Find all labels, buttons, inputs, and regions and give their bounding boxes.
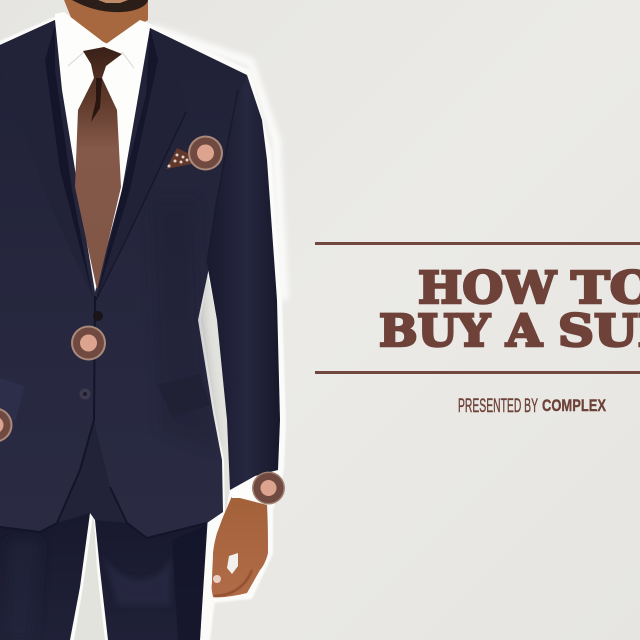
jacket sleeve [207, 75, 280, 490]
figure: suited man [0, 0, 280, 640]
presented by: PRESENTED BY [458, 396, 538, 417]
jacket buttons [80, 311, 103, 400]
white halo around figure [0, 20, 283, 640]
left lapel [0, 20, 93, 298]
title: TO [571, 263, 640, 314]
jacket centre below buttons [57, 420, 127, 523]
title [379, 263, 640, 357]
marker: jacket button [71, 326, 106, 360]
gap between legs [74, 515, 105, 640]
neck and beard [64, 0, 148, 44]
right flap pocket [158, 374, 210, 418]
shirt cuff [230, 486, 258, 498]
bottom rule [315, 371, 640, 374]
marker: sleeve cuff [252, 472, 285, 504]
trousers [0, 500, 208, 640]
sleeve seam [207, 90, 238, 263]
marker: pocket square [188, 136, 223, 170]
jacket body [0, 20, 247, 538]
tie [75, 47, 122, 290]
right lapel [96, 28, 188, 300]
shirt [55, 12, 151, 300]
presented by: COMPLEX [542, 396, 607, 415]
left flap pocket [0, 378, 24, 420]
title: A [505, 306, 543, 357]
title: HOW [418, 263, 557, 314]
marker: jacket pocket [0, 408, 12, 442]
gap between arm and torso [201, 270, 230, 515]
top rule [315, 242, 640, 245]
hand [212, 496, 268, 597]
front opening line [0, 296, 95, 532]
pocket square [166, 148, 194, 169]
title: BUY [379, 306, 491, 357]
jacket side shading [150, 200, 215, 450]
